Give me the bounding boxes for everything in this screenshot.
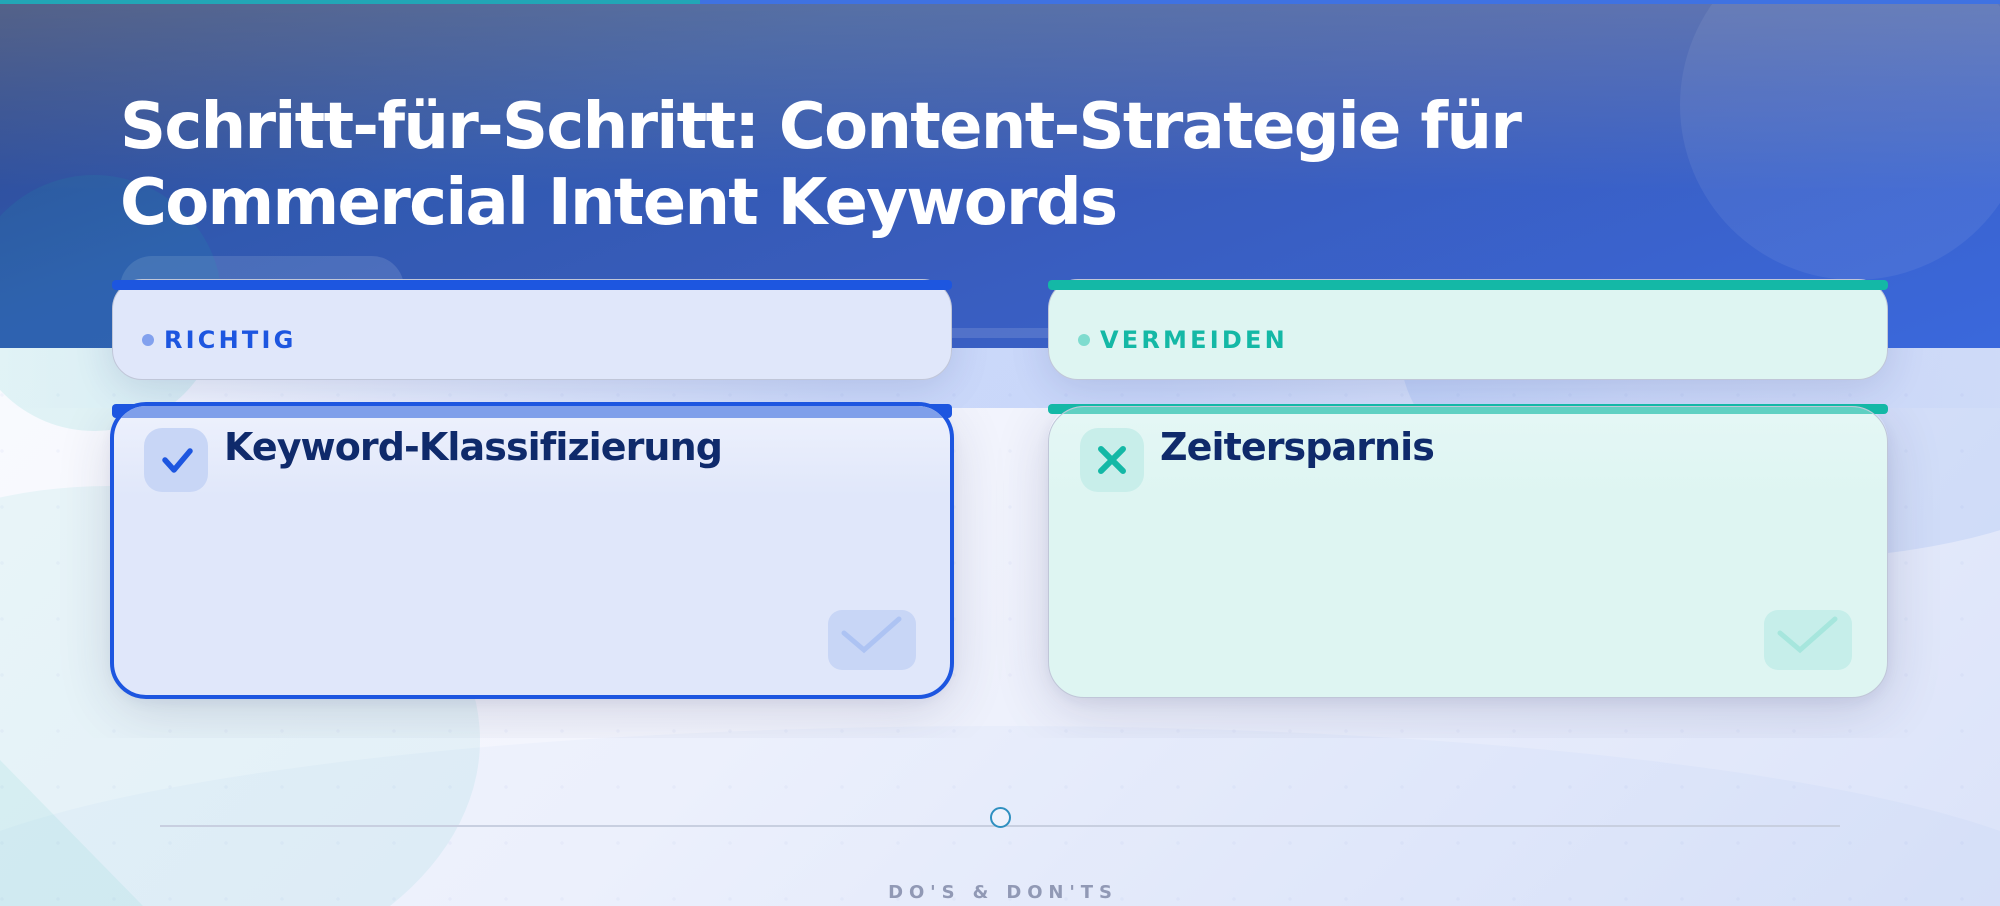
- left teal circle: [0, 175, 222, 431]
- dot: [1078, 334, 1090, 346]
- panel: RICHTIG label: [112, 279, 952, 380]
- card shadows: [92, 414, 1908, 730]
- top accent strip: [0, 0, 2000, 4]
- header panel shadows: [102, 348, 1897, 400]
- icon: cross tile: [1080, 428, 1144, 492]
- panel: VERMEIDEN label: [1048, 279, 1888, 380]
- label text: RICHTIG: [164, 326, 297, 354]
- card title: Zeitersparnis: [1160, 425, 1434, 469]
- panel: card Keyword-Klassifizierung: [110, 402, 954, 699]
- icon: faded check: [1764, 610, 1852, 670]
- footer label: DO'S & DON'TS: [888, 882, 1118, 903]
- timeline marker: [990, 807, 1011, 828]
- icon: faded check: [828, 610, 916, 670]
- title: [120, 90, 1522, 240]
- title: Commercial Intent Keywords: [120, 166, 1116, 240]
- card title: Keyword-Klassifizierung: [224, 425, 722, 469]
- icon: check tile: [144, 428, 208, 492]
- title: Schritt-für-Schritt: Content-Strategie für: [120, 90, 1520, 164]
- label text: VERMEIDEN: [1100, 326, 1288, 354]
- panel: card Zeitersparnis: [1048, 404, 1888, 698]
- header band: [0, 0, 2000, 348]
- dot: [142, 334, 154, 346]
- timeline divider: [160, 807, 1840, 828]
